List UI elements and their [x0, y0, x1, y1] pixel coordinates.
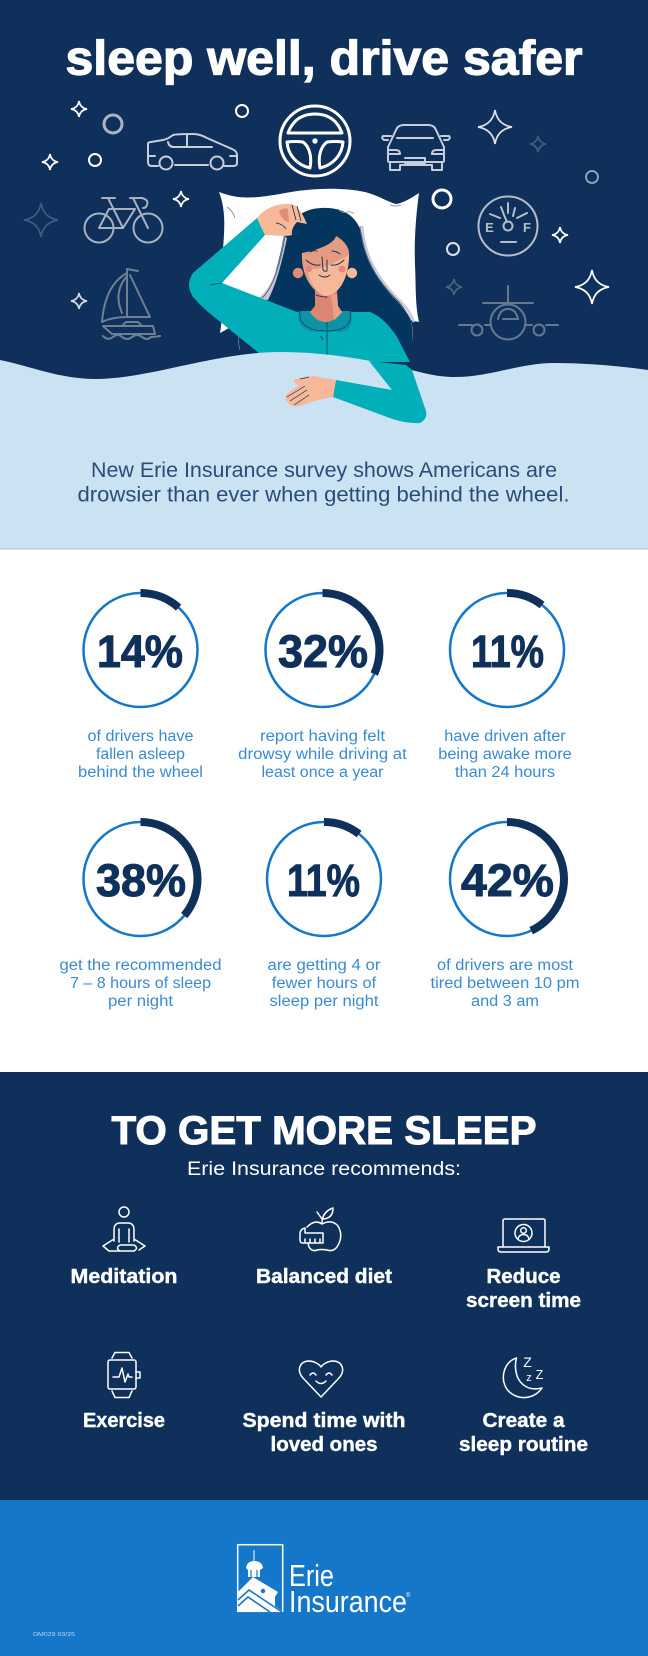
icon: moon with Z letters: Z — [523, 1354, 532, 1370]
decorative stars — [24, 101, 609, 309]
item: loved ones: loved ones — [270, 1434, 378, 1456]
item: loved ones: Spend time with — [242, 1410, 406, 1432]
item: reduce screen time: Reduce — [486, 1266, 560, 1288]
decorative circles — [89, 105, 598, 255]
stat: 14%: of drivers have — [88, 728, 194, 745]
stat: 38%: 38% — [96, 855, 186, 906]
elbow crease — [210, 283, 222, 285]
stat: 14%: fallen asleep — [96, 746, 185, 763]
pillow — [219, 189, 419, 333]
icon: smartwatch — [108, 1352, 140, 1398]
item: exercise — [83, 1352, 165, 1432]
icon: bicycle — [84, 198, 162, 242]
raised hand — [257, 204, 307, 236]
item: meditation — [70, 1207, 178, 1288]
stat: 11% short sleep: sleep per night — [270, 993, 379, 1010]
hair — [250, 208, 412, 365]
stat: 11% drove awake: than 24 hours — [455, 764, 555, 781]
logo: Erie Insurance — [238, 1545, 411, 1619]
stat: 38% — [60, 822, 222, 1010]
stat: 32% — [238, 593, 408, 781]
icon: laptop — [498, 1219, 549, 1252]
subheading: Erie Insurance recommends: — [187, 1159, 461, 1180]
title: sleep well, drive safer — [66, 32, 582, 86]
stat: 11% drove awake: being awake more — [438, 746, 572, 763]
icon: meditating person — [103, 1207, 145, 1251]
resting hand — [285, 376, 336, 406]
intro text: New Erie Insurance survey shows Americans are — [91, 459, 557, 482]
item: balanced diet — [256, 1208, 392, 1288]
icon: moon with Z letters: z — [526, 1372, 532, 1384]
icon: fuel gauge: F — [523, 220, 531, 235]
logo wordmark: Erie — [289, 1558, 334, 1593]
pillow fold lines — [227, 205, 412, 353]
intro text — [78, 459, 570, 506]
blanket wave — [0, 352, 648, 549]
stat: 11% drove awake — [438, 593, 572, 781]
stat: 38%: get the recommended — [60, 957, 222, 974]
icon: apple with tape — [300, 1208, 341, 1251]
item: sleep routine — [459, 1354, 588, 1456]
stat: 14% — [78, 593, 203, 781]
ears — [293, 268, 303, 278]
icon: fuel gauge — [478, 196, 538, 256]
forearm resting over blanket — [333, 361, 426, 423]
stat: 32%: 32% — [278, 626, 368, 677]
logo: Erie Insurance: Insurance — [289, 1584, 407, 1619]
stat: 38%: 7 – 8 hours of sleep — [70, 975, 211, 992]
item: balanced diet: Balanced diet — [256, 1266, 392, 1288]
stat: 11% short sleep — [267, 822, 381, 1010]
icon: smiling heart — [299, 1361, 343, 1397]
cheeks — [306, 266, 312, 272]
stray hair wisps — [338, 209, 354, 214]
stat: 11% short sleep: fewer hours of — [272, 975, 377, 992]
stat: 14%: 14% — [97, 626, 183, 677]
logo mark: building — [238, 1545, 283, 1612]
item: exercise: Exercise — [83, 1410, 165, 1432]
stat: 32%: least once a year — [262, 764, 384, 781]
icon: sedan car — [148, 134, 237, 170]
stat: 38%: per night — [108, 993, 174, 1010]
item: reduce screen time: screen time — [466, 1290, 581, 1312]
document code: DM029 03/25 — [33, 1632, 75, 1638]
item: loved ones — [242, 1361, 406, 1456]
icon: sailboat — [102, 269, 160, 339]
icon: moon with Z letters: Z — [536, 1368, 544, 1382]
stat: 32%: drowsy while driving at — [238, 746, 408, 763]
stat: 42%: tired between 10 pm — [430, 975, 580, 992]
icon: front view car — [382, 125, 450, 170]
intro text: drowsier than ever when getting behind the wheel. — [78, 484, 570, 506]
stat: 11% drove awake: 11% — [471, 626, 544, 677]
stat: 32%: report having felt — [260, 728, 386, 745]
stat: 42%: of drivers are most — [437, 957, 574, 974]
item: sleep routine: sleep routine — [459, 1434, 588, 1456]
heading: TO GET MORE SLEEP — [112, 1109, 536, 1153]
stat: 11% short sleep: are getting 4 or — [268, 957, 380, 974]
stat: 42%: and 3 am — [471, 993, 539, 1010]
stat: 42%: 42% — [461, 855, 554, 906]
item: sleep routine: Create a — [482, 1410, 565, 1432]
torso and raised arm — [189, 218, 410, 362]
stat: 42% — [430, 822, 580, 1010]
stat: 11% short sleep: 11% — [287, 855, 360, 906]
logo: Erie Insurance: ® — [406, 1592, 411, 1599]
panel: footer — [0, 1500, 648, 1656]
panel: recommendations — [0, 1072, 648, 1500]
facial features — [306, 251, 344, 297]
collar — [298, 311, 352, 332]
icon: steering wheel — [280, 106, 350, 176]
item: reduce screen time — [466, 1219, 581, 1312]
illustration: sleeping woman — [189, 189, 419, 365]
stat: 14%: behind the wheel — [78, 764, 203, 781]
icon: airplane — [459, 286, 558, 340]
panel: header — [0, 0, 648, 550]
finger lines — [287, 377, 309, 405]
panel: statistics — [0, 550, 648, 1072]
pillow shadow lines — [362, 226, 414, 322]
face — [302, 236, 349, 296]
icon: fuel gauge: E — [485, 220, 494, 235]
neck — [310, 290, 342, 322]
stat: 11% drove awake: have driven after — [444, 728, 566, 745]
icon: moon with Z letters — [503, 1354, 544, 1398]
item: meditation: Meditation — [70, 1266, 178, 1288]
